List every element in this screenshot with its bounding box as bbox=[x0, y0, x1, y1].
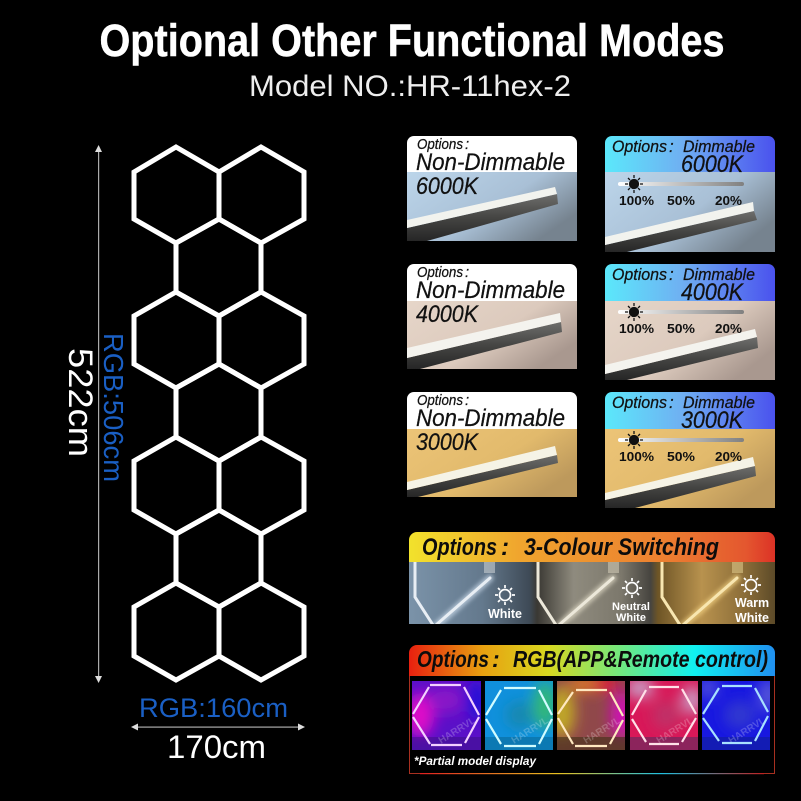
RGB thumbnail: cyan green: HARRVL bbox=[510, 715, 551, 747]
panel: dimmable 4000K: 4000K bbox=[681, 279, 744, 306]
panel: non-dimmable 3000K: : bbox=[465, 392, 469, 409]
panel: non-dimmable 6000K: 6000K bbox=[416, 173, 479, 200]
height label 522cm: 522cm bbox=[61, 348, 99, 457]
panel: 3-colour switching: Warm bbox=[735, 596, 769, 610]
RGB thumbnail: blue: HARRVL bbox=[727, 715, 768, 747]
panel: non-dimmable 3000K: 3000K bbox=[416, 429, 479, 456]
panel: dimmable 4000K: : bbox=[669, 265, 674, 284]
panel: dimmable 6000K bbox=[605, 136, 775, 252]
panel: dimmable 6000K: Options bbox=[612, 137, 667, 156]
panel: dimmable 3000K: Options bbox=[612, 393, 667, 412]
panel: dimmable 4000K: Dimmable bbox=[683, 265, 755, 284]
panel: dimmable 3000K: 50% bbox=[667, 449, 695, 464]
panel: non-dimmable 4000K: : bbox=[465, 264, 469, 281]
height label RGB:506cm: RGB:506cm bbox=[98, 333, 129, 482]
panel: dimmable 3000K: Dimmable bbox=[683, 393, 755, 412]
panel: RGB control: : bbox=[492, 646, 500, 672]
panel: dimmable 3000K: 100% bbox=[619, 449, 654, 464]
panel: dimmable 6000K: Dimmable bbox=[683, 137, 755, 156]
panel: non-dimmable 4000K bbox=[407, 264, 577, 369]
panel: dimmable 4000K: 20% bbox=[715, 321, 742, 336]
RGB thumbnail: multicolour bbox=[557, 681, 625, 750]
panel: RGB control bbox=[406, 645, 778, 774]
panel: RGB control: Options bbox=[417, 646, 489, 672]
panel: dimmable 3000K bbox=[605, 392, 775, 508]
panel: dimmable 6000K: : bbox=[669, 137, 674, 156]
panel: dimmable 4000K: Options bbox=[612, 265, 667, 284]
width label RGB:160cm: RGB:160cm bbox=[139, 693, 288, 723]
panel: dimmable 4000K: 50% bbox=[667, 321, 695, 336]
panel: non-dimmable 3000K bbox=[407, 392, 577, 497]
height arrow bbox=[95, 145, 102, 683]
panel: dimmable 3000K: 3000K bbox=[681, 407, 744, 434]
RGB thumbnail: purple: HARRVL bbox=[437, 715, 478, 747]
width arrow bbox=[131, 724, 305, 730]
RGB thumbnail: cyan green bbox=[485, 681, 557, 750]
panel: dimmable 4000K: 100% bbox=[619, 321, 654, 336]
panel: non-dimmable 4000K: Non-Dimmable bbox=[416, 277, 565, 304]
panel: 3-colour switching: Neutral bbox=[612, 601, 650, 613]
panel: 3-colour switching bbox=[409, 532, 775, 626]
title: Optional Other Functional Modes bbox=[100, 15, 724, 66]
hexagon light layout bbox=[134, 147, 304, 680]
panel: dimmable 3000K: 20% bbox=[715, 449, 742, 464]
panel: dimmable 4000K bbox=[605, 264, 775, 380]
panel: dimmable 6000K: 6000K bbox=[681, 151, 744, 178]
subtitle: model number: Model NO.:HR-11hex-2 bbox=[249, 70, 571, 103]
panel: non-dimmable 4000K: 4000K bbox=[416, 301, 479, 328]
footnote: *Partial model display bbox=[414, 754, 537, 768]
panel: dimmable 6000K: 100% bbox=[619, 193, 654, 208]
RGB thumbnail: purple bbox=[412, 681, 481, 750]
panel: dimmable 6000K: 50% bbox=[667, 193, 695, 208]
panel: non-dimmable 6000K: Non-Dimmable bbox=[416, 149, 565, 176]
RGB thumbnail: pink red bbox=[630, 681, 698, 750]
panel: non-dimmable 6000K: : bbox=[465, 136, 469, 153]
panel: non-dimmable 6000K: Options bbox=[417, 136, 463, 153]
RGB thumbnail: blue bbox=[702, 681, 770, 750]
panel: 3-colour switching: White bbox=[616, 612, 646, 624]
panel: 3-colour switching: White bbox=[735, 611, 769, 625]
panel: dimmable 3000K: : bbox=[669, 393, 674, 412]
panel: non-dimmable 3000K: Non-Dimmable bbox=[416, 405, 565, 432]
panel: 3-colour switching: : bbox=[501, 534, 509, 561]
panel: non-dimmable 6000K bbox=[407, 136, 577, 241]
panel: 3-colour switching: 3-Colour Switching bbox=[524, 534, 719, 561]
RGB thumbnail: multicolour: HARRVL bbox=[582, 715, 623, 747]
panel: non-dimmable 4000K: Options bbox=[417, 264, 463, 281]
panel: 3-colour switching: White bbox=[488, 607, 522, 621]
panel: dimmable 6000K: 20% bbox=[715, 193, 742, 208]
panel: non-dimmable 3000K: Options bbox=[417, 392, 463, 409]
RGB thumbnail: pink red: HARRVL bbox=[655, 715, 696, 747]
panel: 3-colour switching: Options bbox=[422, 534, 497, 561]
width label 170cm: 170cm bbox=[167, 729, 266, 765]
